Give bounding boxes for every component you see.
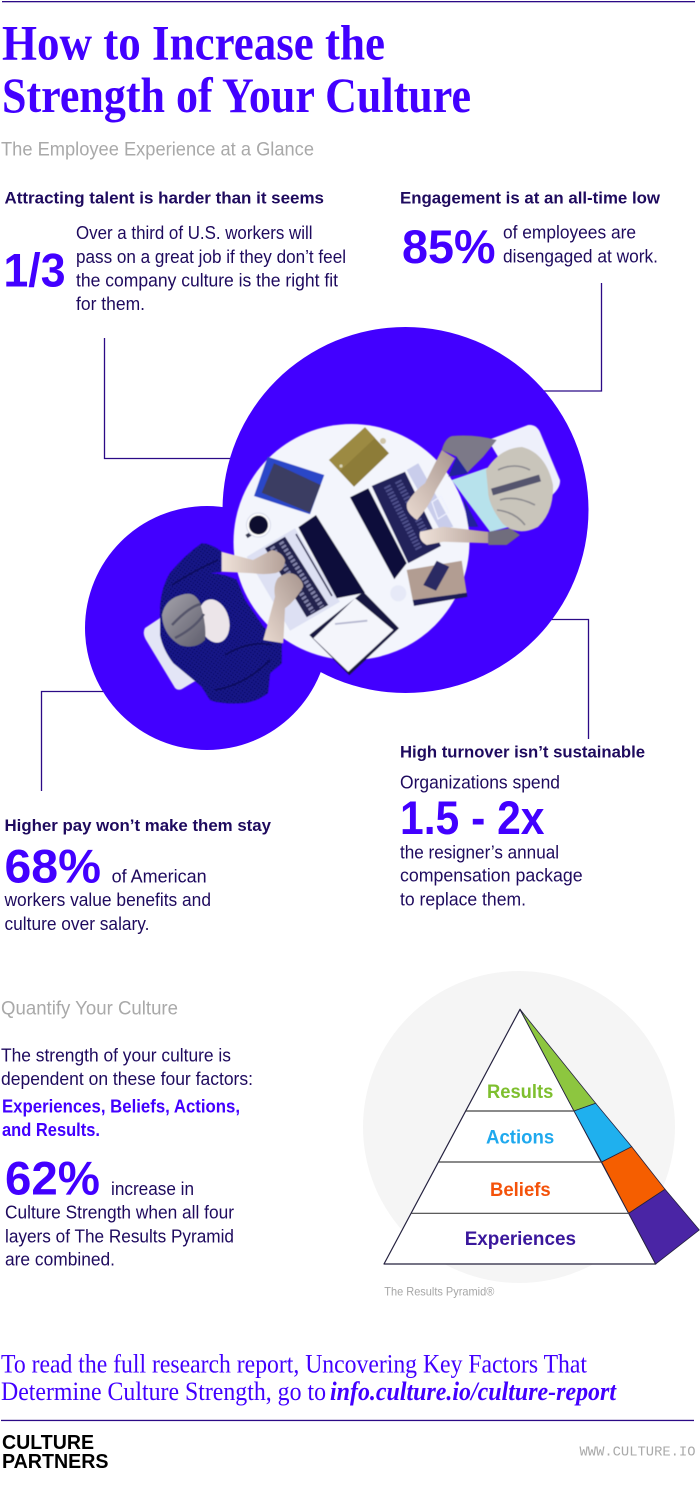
book and phone bbox=[407, 561, 467, 606]
person: woman bbox=[407, 425, 560, 545]
highlighted factors: Experiences, Beliefs, Actions, bbox=[2, 1097, 240, 1117]
chart: the results pyramid bbox=[363, 971, 699, 1299]
label: beliefs: Beliefs bbox=[490, 1179, 551, 1201]
highlighted factors bbox=[2, 1097, 240, 1140]
logo: culture partners bbox=[2, 1431, 108, 1473]
body text: factors intro: dependent on these four factors: bbox=[1, 1069, 253, 1089]
coffee cup bbox=[246, 513, 270, 537]
body text: factors intro: The strength of your culture is bbox=[1, 1045, 231, 1065]
body text: culture strength: Culture Strength when all four bbox=[5, 1203, 234, 1223]
body text: attracting talent: the company culture is the right fit bbox=[76, 271, 338, 291]
call to action: info.culture.io/culture-report bbox=[330, 1377, 617, 1406]
logo: culture partners: CULTURE bbox=[2, 1431, 94, 1454]
body text: engagement: of employees are bbox=[503, 223, 636, 243]
heading: high turnover: High turnover isn’t sustainable bbox=[400, 742, 645, 762]
highlighted factors: and Results. bbox=[2, 1120, 100, 1140]
body text: engagement bbox=[503, 223, 658, 266]
label: actions: Actions bbox=[486, 1126, 554, 1148]
body text: engagement: disengaged at work. bbox=[503, 246, 658, 266]
body text: culture strength: are combined. bbox=[5, 1250, 115, 1270]
caption: The Results Pyramid® bbox=[384, 1285, 494, 1299]
body text: attracting talent: pass on a great job if they don’t feel bbox=[76, 247, 346, 267]
logo: culture partners: PARTNERS bbox=[2, 1450, 108, 1473]
blue notebook bbox=[254, 457, 324, 514]
sleeve bbox=[442, 436, 497, 473]
title: Strength of Your Culture bbox=[2, 67, 471, 123]
side strip: experiences bbox=[629, 1189, 699, 1264]
body text: attracting talent bbox=[76, 223, 346, 314]
side strip: beliefs bbox=[602, 1147, 665, 1213]
title bbox=[2, 14, 471, 123]
stat: 68 percent: 68% bbox=[4, 840, 101, 893]
call to action: To read the full research report, Uncovering Key Factors That bbox=[1, 1349, 588, 1378]
body text: attracting talent: for them. bbox=[76, 294, 145, 314]
large purple circle bbox=[222, 327, 588, 693]
left laptop bbox=[247, 515, 365, 631]
body text: high turnover: to replace them. bbox=[400, 890, 526, 910]
panel: engagement bbox=[400, 188, 661, 273]
panel: four factors bbox=[1, 1045, 253, 1270]
connector lines bbox=[42, 283, 602, 791]
sleeve bbox=[488, 528, 520, 545]
water bottle bbox=[390, 585, 406, 601]
arm bbox=[407, 450, 455, 520]
face bbox=[194, 596, 234, 646]
body text: higher pay: workers value benefits and bbox=[4, 890, 211, 910]
round table bbox=[234, 424, 470, 660]
stat: one third: 1/3 bbox=[4, 244, 66, 297]
scarf bbox=[452, 467, 510, 532]
photo: table and people bbox=[144, 424, 560, 703]
side strip: results bbox=[520, 1009, 596, 1111]
hair bbox=[162, 594, 205, 647]
shirt bbox=[160, 543, 282, 703]
right laptop bbox=[350, 463, 453, 579]
body text: high turnover: compensation package bbox=[400, 866, 583, 886]
arm bbox=[420, 527, 488, 545]
section heading: employee experience: The Employee Experience at a Glance bbox=[1, 139, 314, 161]
body text: culture strength bbox=[5, 1179, 234, 1270]
section heading: quantify your culture: Quantify Your Culture bbox=[1, 997, 178, 1019]
panel: attracting talent bbox=[4, 188, 346, 314]
label: results: Results bbox=[487, 1081, 553, 1103]
panel: higher pay bbox=[4, 816, 272, 934]
chair bbox=[488, 425, 560, 497]
small purple circle bbox=[85, 506, 329, 750]
top bbox=[448, 457, 468, 477]
person: man bbox=[144, 543, 303, 703]
call to action: Determine Culture Strength, go to bbox=[1, 1377, 326, 1406]
body text: culture strength: layers of The Results Pyramid bbox=[5, 1226, 234, 1246]
stat: 85 percent: 85% bbox=[402, 220, 496, 273]
body text: organizations spend: Organizations spend bbox=[400, 773, 560, 793]
body text: attracting talent: Over a third of U.S. workers will bbox=[76, 223, 312, 243]
stat: 62 percent: 62% bbox=[5, 1151, 100, 1204]
notepad bbox=[309, 592, 399, 675]
stat: 1.5 to 2x: 1.5 - 2x bbox=[400, 791, 544, 844]
brown folder bbox=[329, 427, 389, 487]
label: experiences: Experiences bbox=[465, 1228, 576, 1250]
heading: attracting talent: Attracting talent is harder than it seems bbox=[4, 188, 324, 208]
pyramid front face bbox=[384, 1009, 656, 1264]
side strip: actions bbox=[574, 1103, 632, 1162]
body text: higher pay bbox=[4, 867, 211, 934]
title: How to Increase the bbox=[2, 14, 385, 70]
body text: factors intro bbox=[1, 1045, 253, 1089]
website url: WWW.CULTURE.IO bbox=[580, 1445, 696, 1461]
body text: higher pay: of American bbox=[112, 867, 207, 887]
heading: higher pay: Higher pay won’t make them stay bbox=[4, 816, 272, 835]
arm bbox=[263, 573, 303, 643]
call to action bbox=[1, 1349, 617, 1406]
grey background circle bbox=[363, 971, 675, 1283]
heading: engagement: Engagement is at an all-time low bbox=[400, 188, 661, 208]
arm bbox=[222, 550, 285, 574]
illustration: two people working at a round table bbox=[85, 327, 588, 750]
body text: culture strength: increase in bbox=[111, 1179, 194, 1199]
body text: higher pay: culture over salary. bbox=[4, 914, 150, 934]
body text: high turnover bbox=[400, 843, 583, 910]
body text: high turnover: the resigner’s annual bbox=[400, 843, 559, 863]
panel: high turnover bbox=[400, 742, 645, 910]
hair bbox=[486, 447, 553, 531]
chair bbox=[144, 618, 197, 690]
